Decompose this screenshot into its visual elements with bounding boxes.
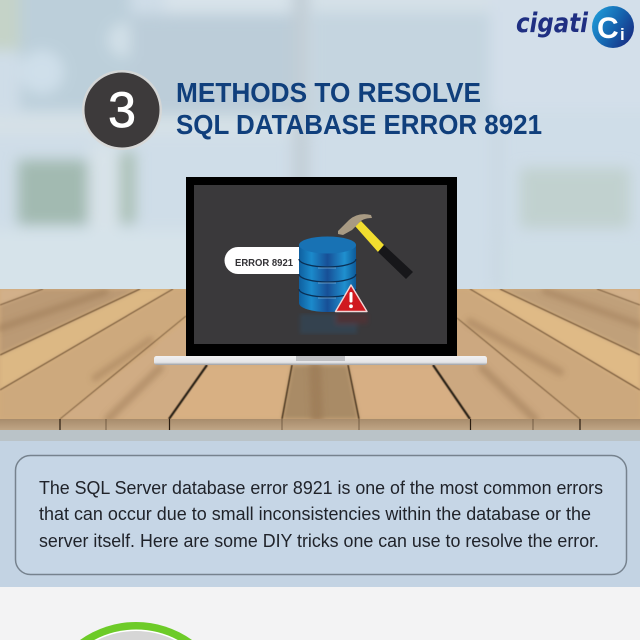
intro paragraph: server itself. Here are some DIY tricks one can use to resolve the error. bbox=[39, 531, 599, 551]
database reflection bbox=[300, 314, 368, 334]
light blue intro section bbox=[0, 441, 640, 587]
wooden table top bbox=[0, 289, 640, 420]
light bottom section bbox=[0, 587, 640, 640]
blurred window background bbox=[0, 0, 640, 300]
title bbox=[176, 77, 542, 140]
intro text box bbox=[16, 456, 626, 574]
logo: cigati: cigati bbox=[516, 8, 589, 39]
laptop base bbox=[154, 356, 487, 365]
plank seams bbox=[0, 289, 640, 419]
logo: cigati bbox=[516, 6, 634, 48]
warning triangle icon bbox=[336, 285, 367, 312]
intro paragraph: The SQL Server database error 8921 is one of the most common errors bbox=[39, 478, 603, 498]
table front edge bbox=[0, 419, 640, 430]
logo badge: C bbox=[597, 12, 619, 45]
title: SQL DATABASE ERROR 8921 bbox=[176, 109, 542, 140]
error pill bbox=[224, 247, 300, 274]
method icon: green ring bbox=[80, 622, 192, 640]
intro paragraph bbox=[39, 478, 603, 551]
intro paragraph: that can occur due to small inconsistencies within the database or the bbox=[39, 504, 591, 524]
logo badge bbox=[592, 6, 634, 48]
laptop bezel bbox=[186, 177, 457, 356]
wood grain streaks bbox=[0, 291, 640, 419]
logo badge: i bbox=[620, 25, 625, 44]
hammer icon bbox=[338, 214, 413, 279]
laptop screen bbox=[194, 185, 447, 344]
number badge: 3 bbox=[108, 82, 136, 138]
title: METHODS TO RESOLVE bbox=[176, 77, 481, 108]
grey table shadow band bbox=[0, 430, 640, 441]
number badge bbox=[82, 70, 162, 150]
error pill: ERROR 8921 bbox=[235, 258, 293, 269]
laptop bbox=[154, 177, 487, 365]
database icon bbox=[299, 236, 356, 312]
